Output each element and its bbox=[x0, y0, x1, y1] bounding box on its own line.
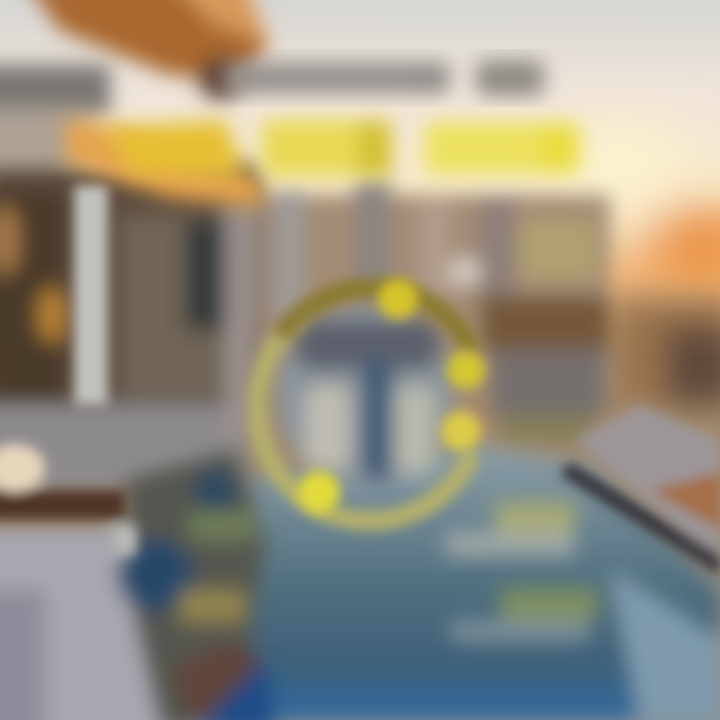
circle interior bbox=[275, 305, 455, 485]
panel: central building bbox=[235, 180, 610, 443]
callout: upper right legend bbox=[445, 502, 575, 556]
orange fascia band bbox=[65, 118, 262, 208]
white column bbox=[74, 185, 108, 405]
table edge bbox=[0, 444, 136, 555]
circle ring bbox=[257, 288, 470, 521]
panel: lower left foreground bbox=[0, 450, 275, 720]
callout: lower right legend bbox=[450, 588, 598, 642]
ring node top bbox=[378, 279, 418, 319]
ring node bottom left bbox=[298, 471, 340, 513]
heading line 1 bbox=[225, 60, 544, 96]
circular diagram bbox=[257, 279, 485, 521]
panel: right deck bbox=[560, 405, 720, 575]
sun glow bbox=[550, 120, 720, 285]
panel: pool water bbox=[220, 445, 720, 720]
ring node right upper bbox=[447, 351, 485, 389]
distant trees right bbox=[615, 300, 720, 405]
ring node right lower bbox=[441, 411, 481, 451]
roof overhang bbox=[25, 0, 268, 100]
heading line 2: yellow bbox=[105, 120, 580, 176]
panel: left building bbox=[0, 65, 260, 490]
